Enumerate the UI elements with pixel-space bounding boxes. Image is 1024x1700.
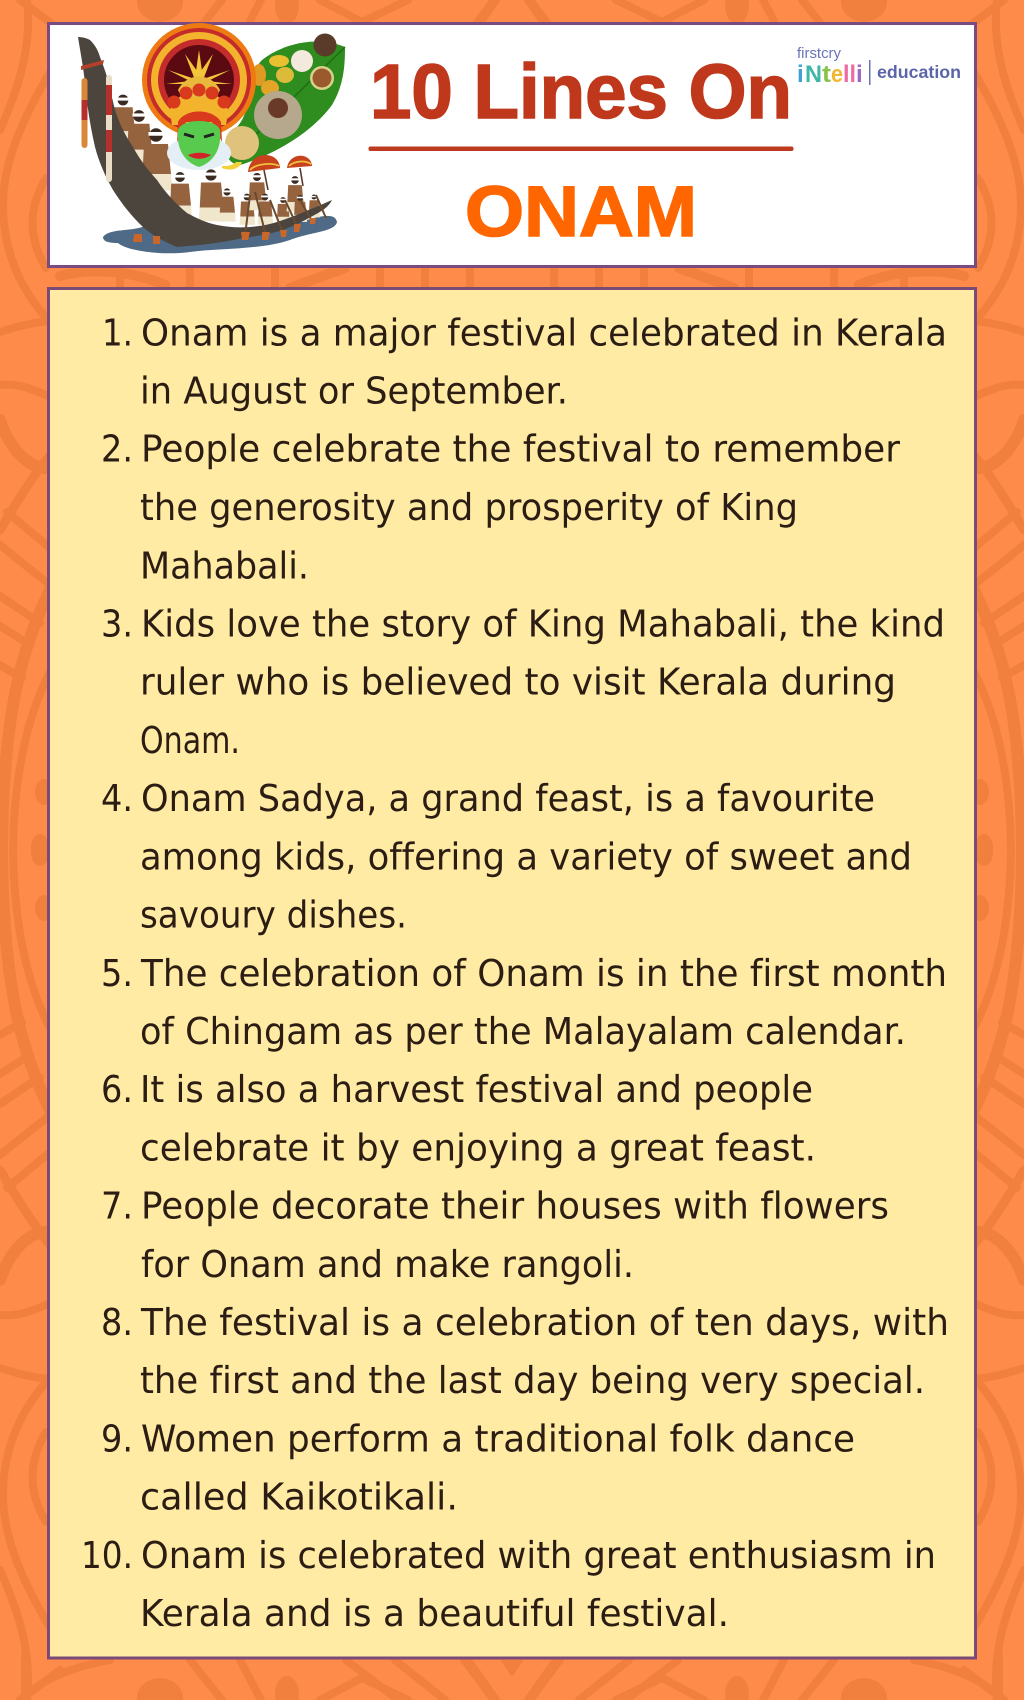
- item 2: [101, 428, 901, 587]
- Kathakali crown halo: [142, 23, 256, 137]
- item 1: in August or September.: [140, 370, 568, 413]
- item 4: 4.: [101, 777, 133, 820]
- item 3: Kids love the story of King Mahabali, the kind: [141, 603, 945, 646]
- item 7: 7.: [101, 1185, 133, 1228]
- item 3: 3.: [101, 603, 133, 646]
- item 5: of Chingam as per the Malayalam calendar.: [140, 1010, 906, 1053]
- logo: FirstCry Intelli education: t: [822, 61, 831, 88]
- boat hull: [78, 37, 332, 247]
- logo: FirstCry Intelli education: [797, 45, 961, 88]
- item 7: People decorate their houses with flowers: [141, 1185, 889, 1228]
- item 8: The festival is a celebration of ten days, with: [140, 1301, 949, 1344]
- item 10: [81, 1534, 936, 1635]
- item 9: Women perform a traditional folk dance: [141, 1417, 855, 1460]
- panel: header: [48, 23, 976, 266]
- item 2: the generosity and prosperity of King: [140, 486, 798, 529]
- item 7: for Onam and make rangoli.: [141, 1243, 634, 1286]
- item 4: savoury dishes.: [140, 894, 407, 937]
- item 10: Onam is celebrated with great enthusiasm in: [141, 1534, 936, 1577]
- item 6: It is also a harvest festival and people: [140, 1068, 813, 1111]
- logo: FirstCry Intelli education: ll: [843, 61, 856, 88]
- white collar: [167, 136, 231, 170]
- panel: ten lines list: [48, 288, 976, 1658]
- front rowers: [169, 169, 320, 225]
- item 8: the first and the last day being very special.: [140, 1359, 925, 1402]
- item 6: 6.: [101, 1068, 133, 1111]
- item 8: 8.: [101, 1301, 133, 1344]
- item 10: Kerala and is a beautiful festival.: [140, 1592, 729, 1635]
- title underline: [368, 146, 794, 151]
- item 3: Onam.: [140, 719, 240, 762]
- logo: FirstCry Intelli education: i: [856, 61, 863, 88]
- item 6: celebrate it by enjoying a great feast.: [140, 1126, 816, 1169]
- oars: [133, 192, 326, 244]
- title: 10 Lines On: 10 Lines On: [370, 49, 792, 135]
- item 1: 1.: [102, 312, 133, 355]
- parasols: [248, 155, 312, 190]
- banana leaf: [222, 34, 345, 170]
- item 3: [101, 603, 945, 762]
- rear rowers standing on boat: [111, 95, 172, 190]
- item 5: 5.: [101, 952, 133, 995]
- logo: FirstCry Intelli education: e: [831, 61, 843, 88]
- item 2: People celebrate the festival to remember: [141, 428, 901, 471]
- item 2: Mahabali.: [140, 544, 309, 587]
- subtitle: ONAM: ONAM: [465, 173, 697, 252]
- item 2: 2.: [101, 428, 133, 471]
- illustration: snake boat, Kathakali face, banana-leaf feast: [78, 23, 345, 253]
- logo: FirstCry Intelli education: i: [797, 61, 804, 88]
- logo: FirstCry Intelli education: education: [877, 62, 961, 82]
- prow bands: [81, 60, 112, 182]
- item 10: 10.: [81, 1534, 133, 1577]
- item 4: among kids, offering a variety of sweet and: [140, 835, 912, 878]
- item 6: [101, 1068, 816, 1169]
- water: [103, 216, 337, 253]
- item 3: ruler who is believed to visit Kerala during: [140, 661, 896, 704]
- green face: [177, 112, 222, 167]
- item 9: [101, 1417, 855, 1519]
- logo: FirstCry Intelli education: firstcry: [797, 45, 841, 62]
- item 5: [101, 952, 947, 1053]
- numbered list text: [81, 312, 949, 1635]
- item 1: [102, 312, 947, 413]
- item 9: 9.: [101, 1417, 133, 1460]
- item 9: called Kaikotikali.: [140, 1476, 458, 1519]
- item 5: The celebration of Onam is in the first month: [140, 952, 947, 995]
- item 4: Onam Sadya, a grand feast, is a favourite: [141, 777, 875, 820]
- item 7: [101, 1185, 889, 1286]
- item 4: [101, 777, 912, 937]
- logo: FirstCry Intelli education: N: [805, 61, 822, 88]
- item 1: Onam is a major festival celebrated in Kerala: [141, 312, 947, 355]
- item 8: [101, 1301, 949, 1402]
